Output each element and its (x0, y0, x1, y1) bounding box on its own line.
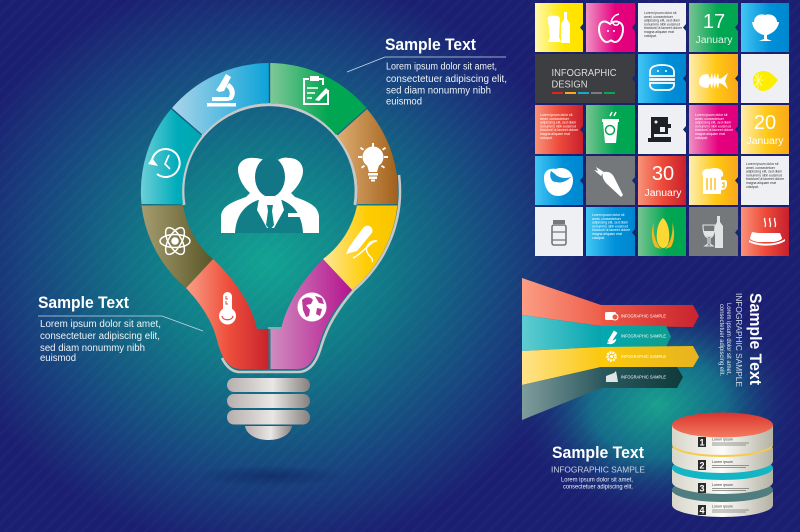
segment: clipboard (270, 63, 366, 135)
segment: idea (337, 109, 398, 204)
icon: history clock (148, 149, 180, 177)
tile: 30 January: January (644, 188, 682, 199)
tile: 17 January: 17 (703, 11, 725, 33)
callout: top right (347, 36, 507, 108)
ribbon: dark (522, 367, 683, 420)
tile: blue text: nonummy nibh euismod (592, 224, 628, 228)
heading: Sample Text (746, 293, 765, 385)
body text: consectetuer adipiscing elit, (40, 331, 160, 342)
tile: round pot (535, 156, 583, 205)
segment: pen (323, 206, 397, 290)
icon: globe (298, 292, 326, 322)
body text: Lorem ipsum dolor sit amet, (561, 476, 633, 484)
icon: microscope (207, 74, 236, 106)
body text (40, 319, 161, 364)
heading: Sample Text (38, 294, 129, 312)
bulb metal base (227, 378, 310, 440)
tile: magenta text (689, 105, 738, 154)
layer one: 1 (699, 438, 705, 448)
tile: beer mug (689, 156, 738, 205)
icon: people (221, 157, 319, 233)
body text: consectetuer adipiscing elit, (386, 74, 507, 85)
tile: text: tincidunt ut laoreet dolore (644, 26, 682, 30)
tile: red text: magna aliquam erat (540, 132, 570, 136)
subheading: INFOGRAPHIC SAMPLE (734, 293, 744, 387)
layer one: Lorem ipsum (712, 438, 733, 442)
tile connectors (580, 24, 741, 236)
tile: carrot (586, 156, 635, 205)
tile: 30 January: 30 (652, 163, 674, 185)
tile: corn (638, 207, 686, 256)
tile: red text: Lorem ipsum dolor sit (540, 113, 572, 117)
tile: text: magna aliquam erat (644, 30, 674, 34)
tile: coffee machine (638, 105, 686, 154)
tile: text: adipiscing elit, sed diam (644, 19, 680, 23)
ribbon: teal: INFOGRAPHIC SAMPLE (621, 334, 666, 340)
tile: magenta text: amet, consectetuer (695, 117, 725, 121)
icon: thermometer (219, 292, 236, 324)
tile: 30 January (638, 156, 686, 205)
tile: apple (586, 3, 635, 52)
text block: bottom (551, 444, 645, 490)
panel: ribbon arrows (522, 278, 699, 420)
bulb shadow (195, 465, 345, 487)
layer two: Lorem ipsum (712, 460, 733, 464)
tile: lemon (741, 54, 789, 103)
tile: white text (741, 156, 789, 205)
tile: magenta text: volutpat. (695, 136, 708, 140)
tile: white text: adipiscing elit, sed diam (746, 170, 782, 174)
tile: soup bowl (741, 207, 789, 256)
layer three: Lorem ipsum (712, 483, 733, 487)
ribbon: dark: INFOGRAPHIC SAMPLE (621, 374, 666, 380)
tile: red text: adipiscing elit, sed diam (540, 121, 576, 125)
ribbon: red: INFOGRAPHIC SAMPLE (621, 314, 666, 320)
tile: red text: tincidunt ut laoreet dolore (540, 128, 578, 132)
cylinder stack (672, 412, 773, 517)
tile: text: Lorem ipsum dolor sit (644, 11, 676, 15)
tile: red text: amet, consectetuer (540, 117, 570, 121)
segment: microscope (172, 63, 269, 135)
tile: white text: tincidunt ut laoreet dolore (746, 177, 784, 181)
tile: 17 January (689, 3, 738, 52)
tile: white text: Lorem ipsum dolor sit (746, 162, 778, 166)
layer two: 2 (699, 460, 705, 470)
tile: blue text (586, 207, 635, 256)
callout: left (38, 294, 203, 364)
layer four: Lorem ipsum (712, 504, 733, 508)
tile: text: volutpat. (644, 34, 657, 38)
ribbon: yellow (522, 346, 699, 385)
body text line two: consectetuer adipiscing elit. (563, 484, 633, 490)
tile: red text: volutpat. (540, 136, 553, 140)
bulb grey rim (183, 105, 400, 372)
icon: pen signature (346, 226, 377, 262)
layer three (672, 456, 773, 494)
tile: text: amet, consectetuer (644, 15, 674, 19)
tile: jar (535, 207, 583, 256)
body text (386, 62, 507, 108)
tile: white text: amet, consectetuer (746, 166, 776, 170)
tile: text: nonummy nibh euismod (644, 22, 680, 26)
tile: red text: nonummy nibh euismod (540, 124, 576, 128)
tile: blue text: volutpat. (592, 236, 605, 240)
tile: infographic design (535, 54, 635, 103)
tile: white text: magna aliquam erat (746, 181, 776, 185)
layer one (672, 412, 773, 455)
tile: text (638, 3, 686, 52)
tile: magenta text: Lorem ipsum dolor sit (695, 113, 727, 117)
tile: red text (535, 105, 583, 154)
tile: coffee cup (586, 105, 635, 154)
segment: thermometer (186, 259, 268, 369)
tile: magenta text: magna aliquam erat (695, 132, 725, 136)
panel: tile grid (535, 3, 789, 256)
light bulb diagram (141, 63, 400, 487)
tile: 17 January: January (696, 35, 732, 46)
ribbon: red (522, 278, 699, 327)
layer four: 4 (699, 506, 705, 516)
layer three: 3 (699, 484, 705, 494)
body text: sed diam nonummy nibh (386, 86, 491, 96)
tile: beer and bottle (535, 3, 583, 52)
tile: magenta text: adipiscing elit, sed diam (695, 121, 731, 125)
leader line (347, 57, 506, 72)
tile: infographic design: DESIGN (552, 78, 588, 90)
tile: blue text: amet, consectetuer (592, 217, 622, 221)
segment: clock (141, 109, 202, 204)
rotated text block (718, 293, 765, 387)
layer two (672, 433, 773, 473)
tile: blue text: Lorem ipsum dolor sit (592, 213, 624, 217)
body text: sed diam nonummy nibh (40, 343, 145, 354)
body text: Lorem ipsum dolor sit amet, (386, 62, 497, 72)
tile: blue text: magna aliquam erat (592, 232, 622, 236)
body text: euismod (40, 353, 76, 364)
body text: Lorem ipsum dolor sit amet, (725, 303, 732, 375)
layer four (672, 478, 773, 517)
body text: Lorem ipsum dolor sit amet, (40, 319, 161, 330)
tile: 20 January (741, 105, 789, 154)
tile: blue text: adipiscing elit, sed diam (592, 221, 628, 225)
subheading: INFOGRAPHIC SAMPLE (551, 464, 645, 474)
tile: 20 January: January (746, 136, 784, 147)
tile: fish bone (689, 54, 738, 103)
ribbon: yellow: INFOGRAPHIC SAMPLE (621, 354, 666, 360)
tile: infographic design: INFOGRAPHIC (552, 67, 617, 79)
segment: globe (270, 259, 352, 369)
icon: clipboard (304, 76, 329, 104)
leader line (38, 316, 203, 331)
segment: atom (142, 206, 213, 288)
tile: 20 January: 20 (754, 112, 776, 134)
icon: light bulb (358, 143, 388, 182)
tile: burger (638, 54, 686, 103)
tile: wine and bottle (689, 207, 738, 256)
heading: Sample Text (385, 36, 476, 54)
body text: euismod (386, 96, 422, 108)
heading: Sample Text (552, 444, 644, 462)
tile: white text: nonummy nibh euismod (746, 173, 782, 177)
ribbon: teal (522, 315, 671, 351)
tile: white text: volutpat. (746, 185, 759, 189)
body text line two: consectetuer adipiscing elit. (718, 304, 725, 376)
tile: magenta text: nonummy nibh euismod (695, 124, 731, 128)
tile: blue text: tincidunt ut laoreet dolore (592, 228, 630, 232)
icon: atom (160, 225, 190, 257)
tile: magenta text: tincidunt ut laoreet dolore (695, 128, 733, 132)
tile: ice cream (741, 3, 789, 52)
